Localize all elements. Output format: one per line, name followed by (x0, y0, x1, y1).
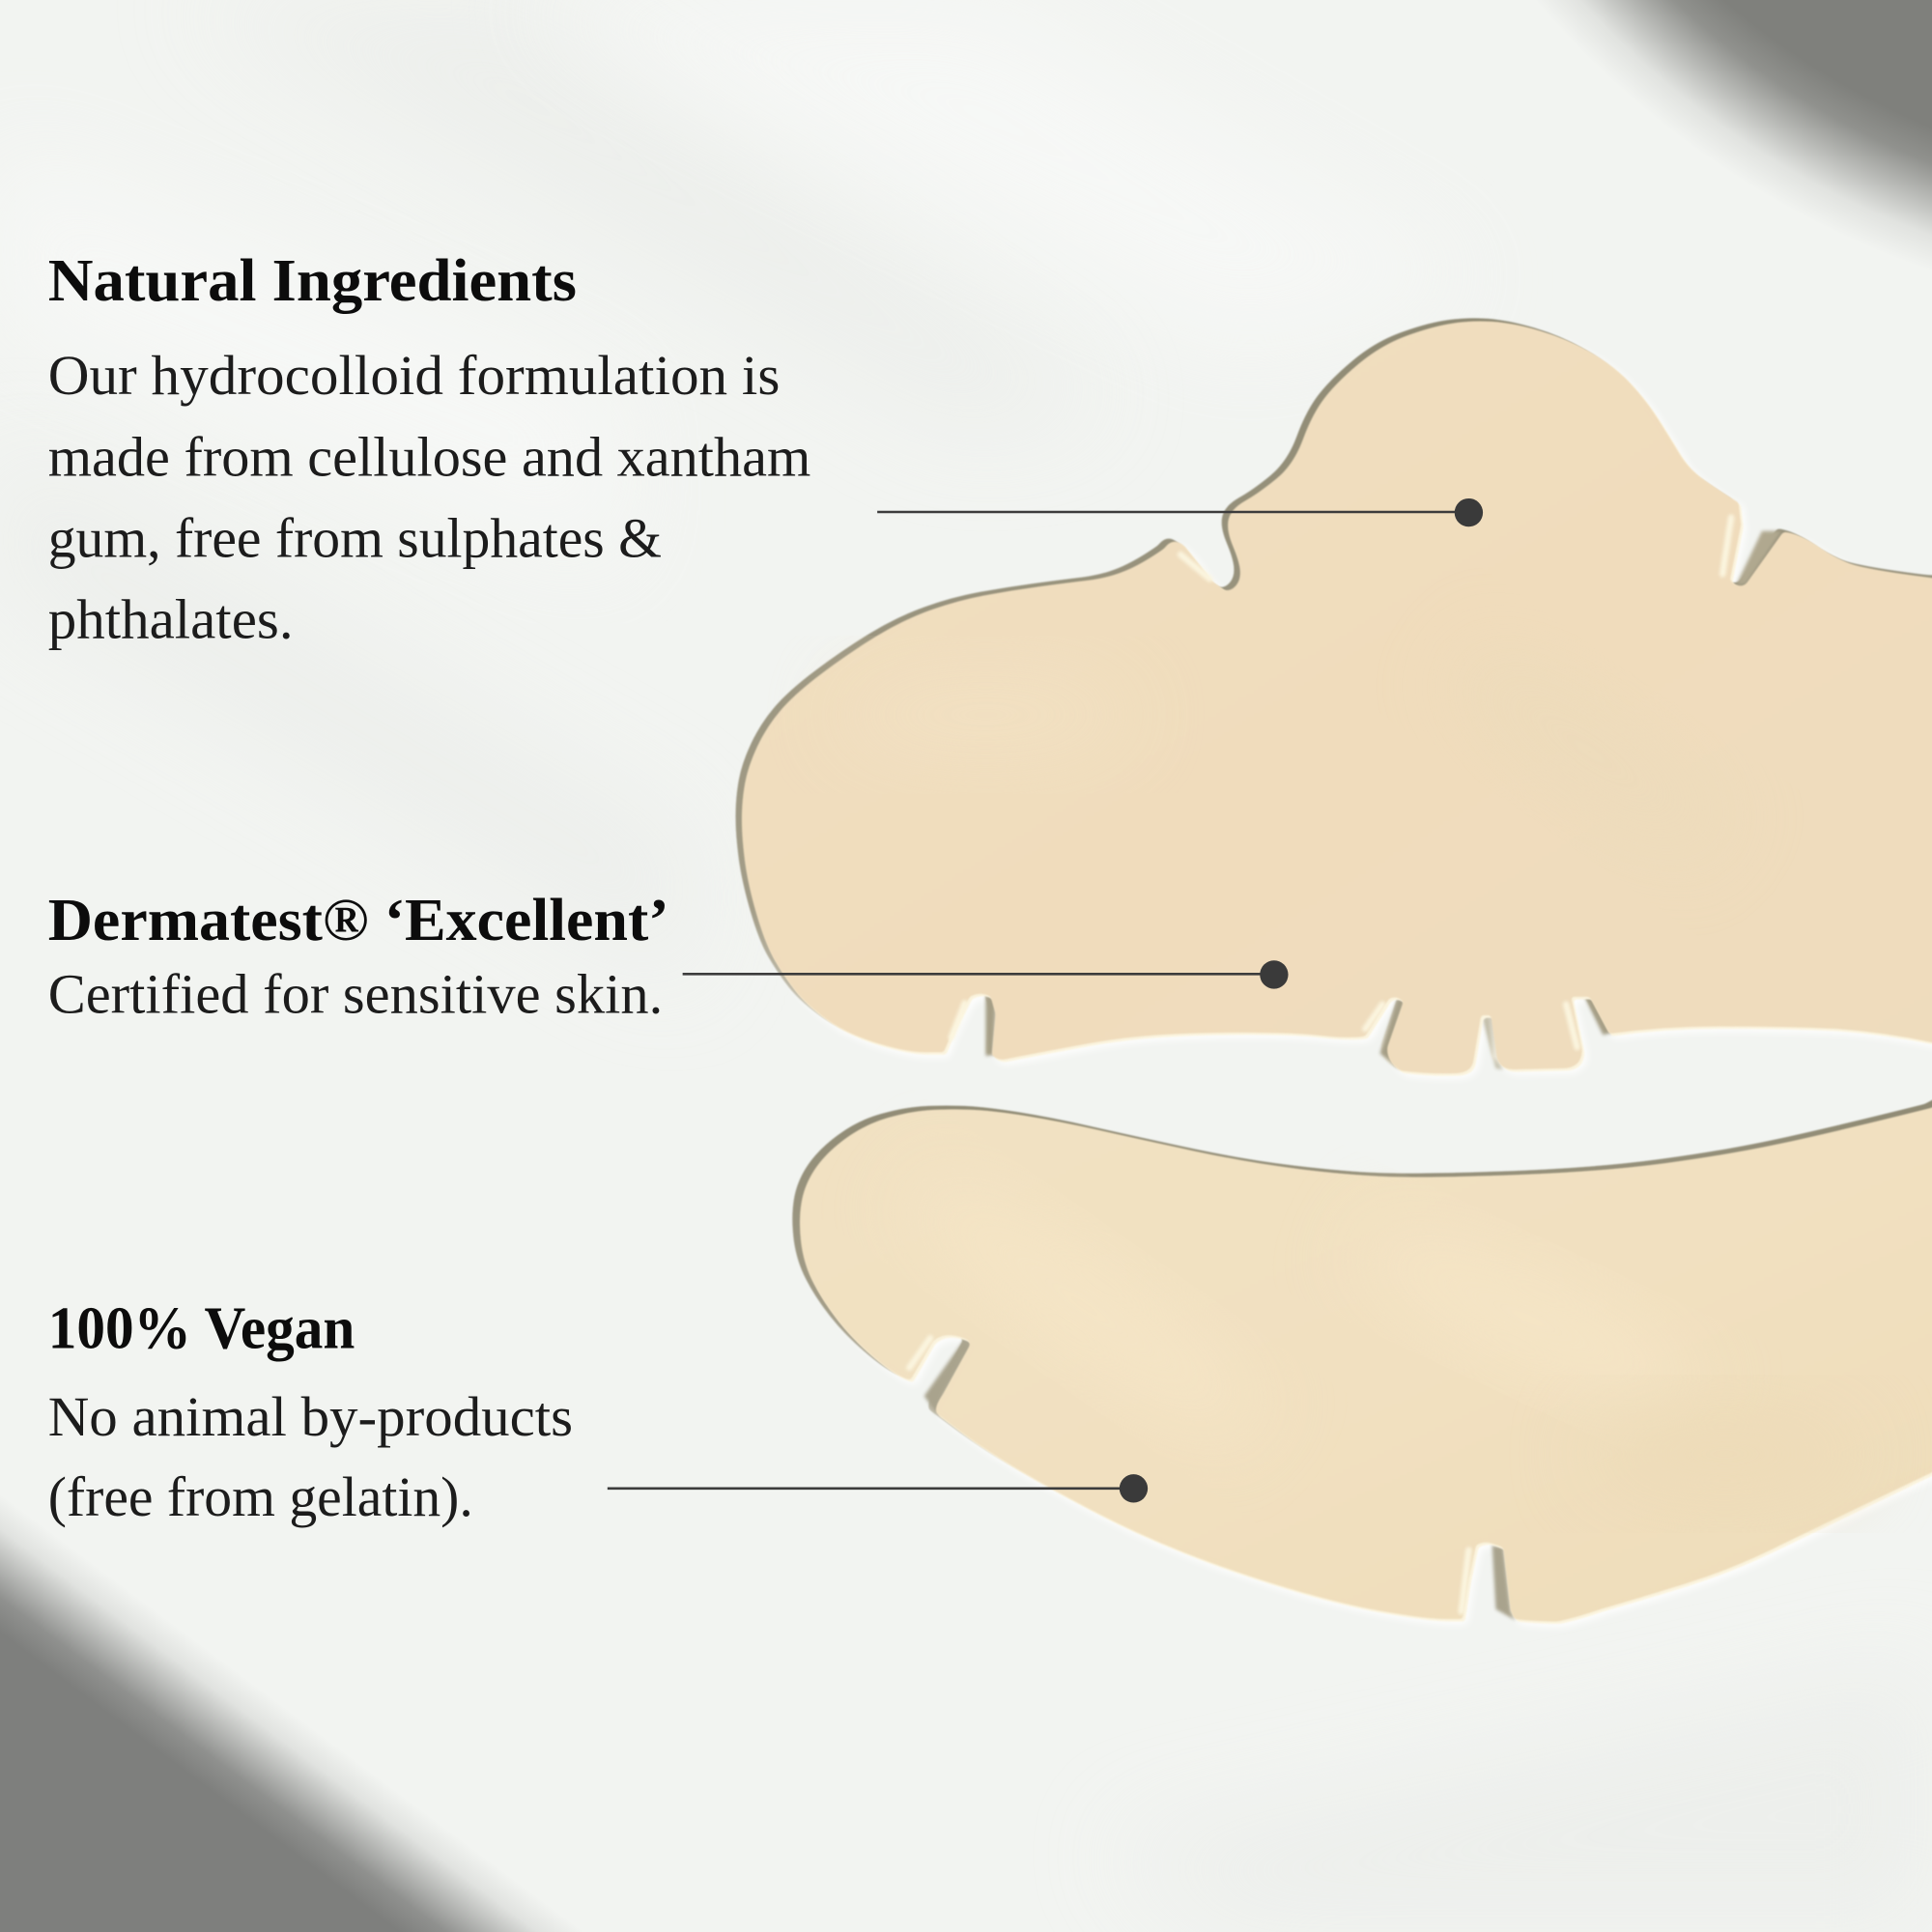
text block: certification: Certified for sensitive skin. (48, 962, 663, 1025)
callout: dermatest pointer (683, 960, 1289, 989)
section: natural ingredients (48, 246, 810, 651)
text block: vegan description (48, 1385, 573, 1528)
text block: ingredients description: Our hydrocolloid formulation is (48, 344, 780, 407)
text block: ingredients description (48, 344, 810, 651)
text block: ingredients description: gum, free from sulphates & (48, 507, 662, 570)
callout: vegan pointer (608, 1474, 1148, 1502)
section: vegan (48, 1293, 573, 1528)
text block: ingredients description: phthalates. (48, 588, 294, 651)
text block: vegan description: (free from gelatin). (48, 1465, 473, 1528)
heading: Natural Ingredients: Natural Ingredients (48, 246, 577, 314)
patch: lower crescent strip (792, 1093, 1932, 1627)
heading: 100% Vegan: 100% Vegan (48, 1293, 355, 1361)
text block: ingredients description: made from cellulose and xantham (48, 425, 810, 488)
patch: upper nose strip (735, 318, 1932, 1078)
text block: vegan description: No animal by-products (48, 1385, 573, 1448)
section: dermatest (48, 886, 669, 1025)
callout: natural ingredients pointer (877, 498, 1483, 526)
heading: Dermatest Excellent: Dermatest® ‘Excellent’ (48, 886, 669, 953)
